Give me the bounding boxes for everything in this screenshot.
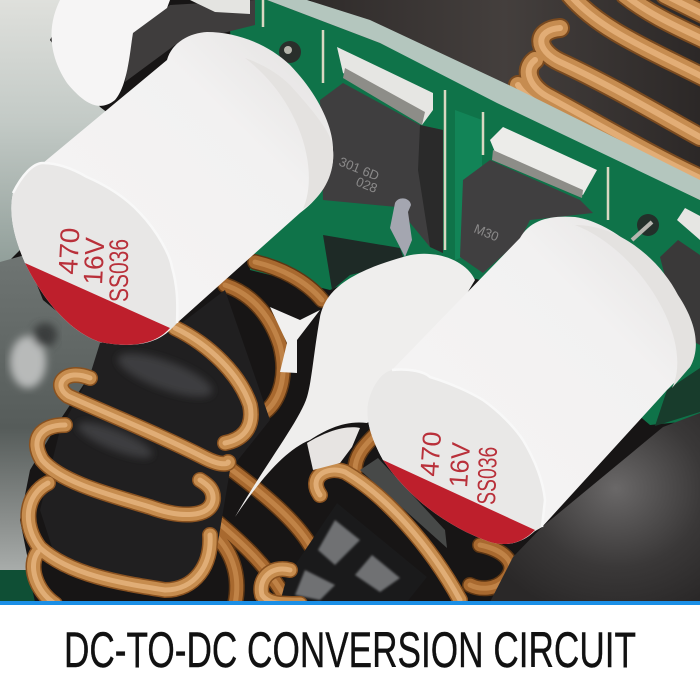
back copper coil windings	[215, 262, 511, 604]
MOSFET components: M30	[472, 221, 501, 244]
capacitor marking: 470	[414, 430, 447, 477]
front copper coil windings	[28, 328, 460, 604]
capacitor marking: SS036	[104, 239, 134, 302]
green circuit board	[230, 0, 700, 425]
capacitor red band	[383, 460, 535, 544]
black toroid cores	[40, 290, 700, 602]
MOSFET marking: 301 6D	[337, 154, 381, 183]
MOSFET components: 028	[354, 174, 380, 196]
caption band	[0, 601, 700, 700]
capacitor marking	[414, 430, 503, 505]
capacitor red band	[25, 263, 170, 345]
capacitor marking: 470	[53, 227, 85, 275]
MOSFET components	[125, 0, 700, 345]
capacitor: right	[367, 217, 696, 544]
capacitor marking: SS036	[471, 446, 503, 505]
capacitor: left	[11, 32, 333, 345]
capacitor marking: 16V	[78, 237, 110, 285]
capacitor marking	[53, 227, 134, 302]
capacitor end face	[11, 163, 177, 330]
capacitor end face	[367, 369, 545, 531]
capacitor marking: 16V	[443, 441, 476, 488]
white thermal paste	[51, 0, 475, 517]
top right copper coil	[518, 0, 700, 195]
